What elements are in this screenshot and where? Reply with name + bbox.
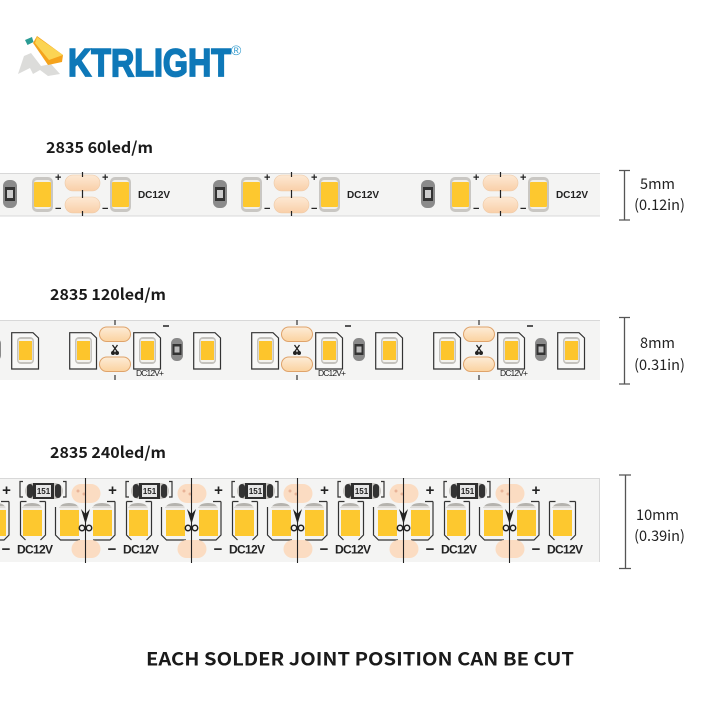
strip: 240led/m — [0, 478, 600, 563]
strip: 60led/m: − — [102, 203, 108, 215]
strip: 240led/m: 151 — [37, 487, 51, 496]
heading: 2835 240led/m: 2835 240led/m — [50, 441, 166, 463]
strip: 240led/m: − — [320, 541, 329, 558]
strip: 60led/m: DC12V — [347, 190, 379, 201]
strip: 240led/m: + — [320, 482, 329, 499]
strip: 60led/m: + — [264, 172, 270, 184]
caption: EACH SOLDER JOINT POSITION CAN BE CUT — [146, 646, 574, 672]
heading: 2835 60led/m: 2835 60led/m — [46, 136, 153, 158]
strip: 60led/m: + — [473, 172, 479, 184]
logo wordmark: KTRLIGHT — [68, 42, 231, 85]
dimension: 10mm: 10mm — [636, 504, 679, 525]
heading: 2835 120led/m: 2835 120led/m — [50, 283, 166, 305]
strip: 240led/m: DC12V — [335, 542, 371, 556]
strip: 240led/m: 151 — [461, 487, 475, 496]
strip: 60led/m: DC12V — [556, 190, 588, 201]
strip: 60led/m: + — [311, 172, 317, 184]
dimension: 8mm — [619, 318, 685, 384]
registered mark: ® — [231, 42, 242, 58]
dimension: 10mm — [619, 475, 685, 568]
dimension: 5mm — [619, 170, 685, 220]
strip: 60led/m: DC12V — [138, 190, 170, 201]
strip: 60led/m: − — [264, 203, 270, 215]
strip: 60led/m: − — [55, 203, 61, 215]
strip: 60led/m: + — [102, 172, 108, 184]
strip: 60led/m: + — [55, 172, 61, 184]
strip: 240led/m: DC12V — [229, 542, 265, 556]
strip: 240led/m: − — [532, 541, 541, 558]
strip: 240led/m: − — [108, 541, 117, 558]
strip: 240led/m: 151 — [355, 487, 369, 496]
dimension: 10mm: (0.39in) — [634, 525, 685, 546]
strip: 240led/m: + — [214, 482, 223, 499]
strip: 120led/m: DC12V+ — [136, 368, 164, 378]
strip: 60led/m: + — [520, 172, 526, 184]
dimension: 5mm: 5mm — [640, 173, 675, 194]
strip: 240led/m: + — [426, 482, 435, 499]
strip: 120led/m: DC12V+ — [318, 368, 346, 378]
strip: 120led/m: DC12V+ — [500, 368, 528, 378]
strip: 240led/m: + — [2, 482, 11, 499]
logo — [18, 36, 242, 85]
strip: 240led/m: DC12V — [441, 542, 477, 556]
strip: 240led/m: − — [214, 541, 223, 558]
strip: 240led/m: + — [108, 482, 117, 499]
strip: 240led/m: DC12V — [17, 542, 53, 556]
strip: 60led/m: − — [473, 203, 479, 215]
strip: 120led/m — [0, 320, 600, 380]
dimension: 8mm: (0.31in) — [634, 354, 685, 375]
icon: logo mark — [18, 36, 63, 76]
strip: 240led/m: 151 — [143, 487, 157, 496]
strip: 240led/m: − — [426, 541, 435, 558]
dimension: 5mm: (0.12in) — [634, 194, 685, 215]
strip: 240led/m: DC12V — [123, 542, 159, 556]
dimension: 8mm: 8mm — [640, 332, 675, 353]
strip: 60led/m — [0, 172, 600, 216]
strip: 60led/m: − — [520, 203, 526, 215]
strip: 60led/m: − — [311, 203, 317, 215]
strip: 240led/m: + — [532, 482, 541, 499]
strip: 240led/m: − — [2, 541, 11, 558]
strip: 240led/m: DC12V — [547, 542, 583, 556]
strip: 240led/m: 151 — [249, 487, 263, 496]
